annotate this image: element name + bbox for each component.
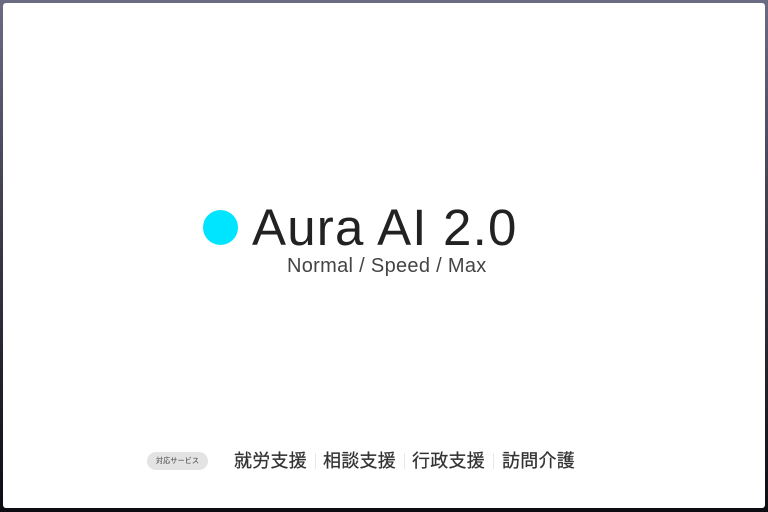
title: Aura AI 2.0 — [252, 199, 518, 256]
service: consultation support: 相談支援 — [323, 451, 396, 471]
subtitle: Normal / Speed / Max — [287, 255, 487, 277]
service: administrative support: 行政支援 — [412, 451, 485, 471]
badge: supported services — [147, 452, 208, 470]
badge: supported services: 対応サービス — [156, 456, 199, 465]
service: home-visit care: 訪問介護 — [502, 451, 575, 471]
service list — [234, 451, 575, 471]
icon: cyan circle — [202, 210, 238, 244]
service: employment support: 就労支援 — [234, 451, 307, 471]
